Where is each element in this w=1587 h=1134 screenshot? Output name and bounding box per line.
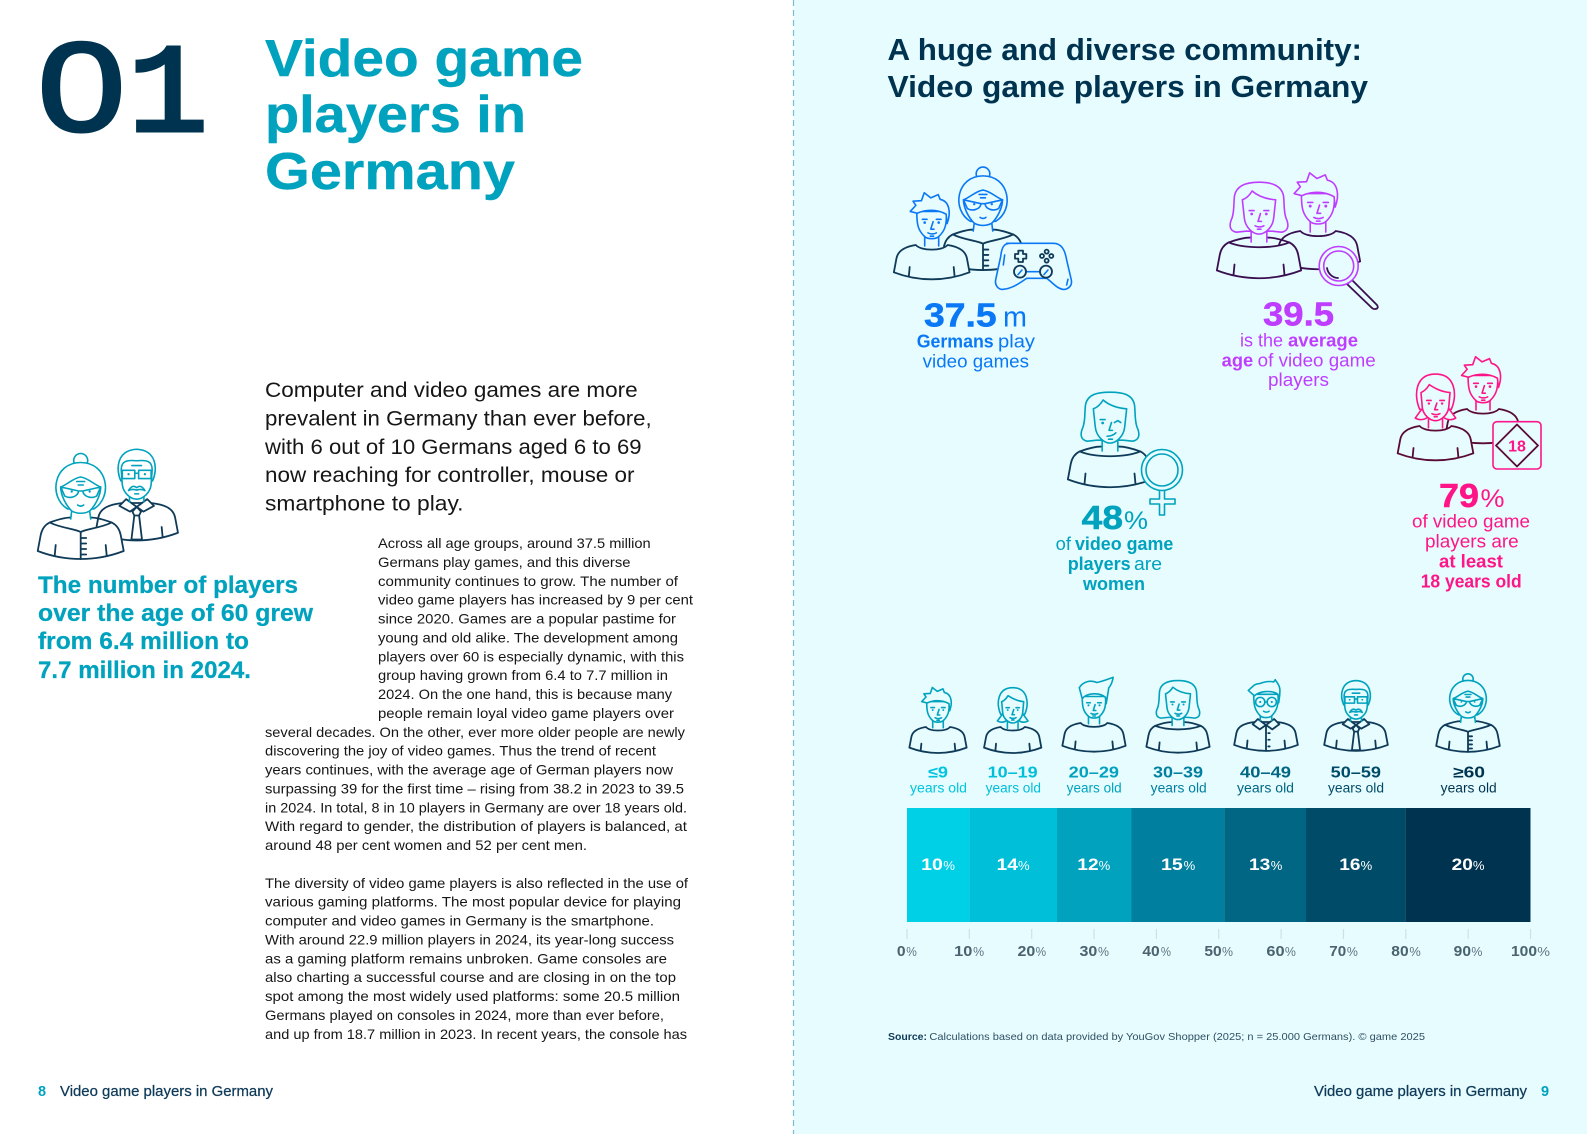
- stat text: at least: [1439, 552, 1503, 572]
- bar value labels: 13: [1249, 856, 1270, 874]
- chart title: A huge and diverse community:: [888, 32, 1362, 67]
- body text: since 2020. Games are a popular pastime for: [378, 612, 676, 626]
- body text: Germans played on consoles in 2024, more than ever before,: [265, 1008, 664, 1023]
- stat text: age: [1222, 351, 1253, 371]
- chart axis: [897, 929, 1550, 960]
- body text: With around 22.9 million players in 2024, its year-long success: [265, 932, 674, 948]
- bar value labels: %: [1018, 859, 1030, 873]
- stat text: 79: [1439, 477, 1479, 514]
- stat text: [1222, 296, 1376, 390]
- age group labels: ≤9: [928, 765, 948, 782]
- body text: discovering the joy of video games. Thus the trend of recent: [265, 744, 656, 759]
- age group figures: [909, 674, 1500, 753]
- stat text: m: [1003, 302, 1027, 334]
- chart axis: %: [1222, 945, 1233, 959]
- age group labels: 40–49: [1240, 765, 1291, 782]
- body text: The diversity of video game players is also reflected in the use of: [265, 876, 688, 891]
- body text: 2024. On the one hand, this is because many: [378, 687, 672, 702]
- page title: [265, 30, 583, 201]
- page title: Video game: [265, 30, 583, 88]
- body text: spot among the most widely used platforms: some 20.5 million: [265, 989, 680, 1004]
- body text: video game players has increased by 9 per cent: [378, 593, 693, 608]
- bar value labels: 12: [1077, 856, 1099, 874]
- body text: computer and video games in Germany is the smartphone.: [265, 914, 654, 929]
- chapter number: [38, 16, 208, 168]
- body text: community continues to grow. The number of: [378, 574, 678, 589]
- chart axis: 40: [1142, 943, 1160, 960]
- source note: Source:: [888, 1031, 927, 1043]
- chart axis: %: [906, 945, 917, 959]
- icon: 20 to 29: [1062, 677, 1126, 752]
- icon: 40 to 49: [1234, 680, 1298, 751]
- age group labels: years old: [1441, 780, 1497, 796]
- icon: woman, man and magnifier: [1217, 173, 1378, 309]
- stat text: [1412, 477, 1530, 592]
- age group labels: years old: [1237, 780, 1294, 796]
- age group labels: years old: [1151, 780, 1207, 796]
- callout: players over 60: [38, 572, 314, 684]
- icon: older players: [38, 449, 178, 559]
- stat text: 37.5: [924, 297, 997, 334]
- body text: Germans play games, and this diverse: [378, 555, 631, 570]
- body text: Across all age groups, around 37.5 million: [378, 536, 651, 551]
- stat text: video game: [1075, 534, 1173, 554]
- stat: 79 percent adults: [1398, 357, 1541, 592]
- page title: Germany: [265, 143, 515, 201]
- stat text: of video game: [1412, 512, 1530, 532]
- body text: years continues, with the average age of German players now: [265, 763, 673, 778]
- chart axis: %: [1098, 945, 1109, 959]
- stat text: video games: [923, 352, 1029, 372]
- stat text: of: [1056, 534, 1072, 554]
- age group labels: 50–59: [1331, 765, 1381, 782]
- icon: woman, man and age rating 18: [1398, 357, 1541, 469]
- bar value labels: 10: [921, 856, 943, 874]
- body text: people remain loyal video game players over: [378, 706, 674, 721]
- stat text: players: [1268, 370, 1329, 390]
- icon: 50 to 59: [1324, 681, 1388, 751]
- bar value labels: %: [1271, 859, 1282, 873]
- icon: woman, man and age rating 18: 18: [1508, 438, 1526, 456]
- chapter number: 0: [38, 16, 125, 158]
- stat text: %: [1480, 485, 1504, 513]
- stat text: 48: [1082, 499, 1123, 536]
- age group labels: [910, 765, 1497, 796]
- stat text: players: [1068, 554, 1131, 574]
- bar value labels: 15: [1161, 856, 1183, 874]
- bar value labels: 20: [1452, 856, 1473, 874]
- chart axis: 30: [1080, 943, 1097, 960]
- chart title: Video game players in Germany: [888, 69, 1369, 104]
- body text: young and old alike. The development among: [378, 630, 678, 645]
- page divider: [792, 0, 794, 1134]
- source note: Calculations based on data provided by YouGov Shopper (2025; n = 25.000 Germans). © game 2025: [929, 1031, 1425, 1043]
- chapter number: 1: [128, 26, 208, 168]
- callout: players over 60: The number of players: [38, 572, 298, 599]
- stat text: average: [1288, 331, 1358, 351]
- lead paragraph: with 6 out of 10 Germans aged 6 to 69: [264, 435, 642, 459]
- chart axis: 70: [1329, 943, 1346, 960]
- callout: players over 60: from 6.4 million to: [38, 628, 249, 655]
- chart axis: 80: [1391, 943, 1409, 960]
- bar value labels: %: [1361, 859, 1372, 873]
- body text: in 2024. In total, 8 in 10 players in Germany are over 18 years old.: [265, 800, 687, 815]
- stat text: is the: [1240, 331, 1283, 351]
- stat text: [917, 297, 1035, 372]
- stat: 37.5 million players: [894, 167, 1072, 372]
- bar value labels: 16: [1339, 856, 1360, 874]
- footer right: Video game players in Germany: [1314, 1084, 1528, 1100]
- age group labels: years old: [1067, 780, 1122, 796]
- chart axis: 50: [1204, 943, 1222, 960]
- body text: around 48 per cent women and 52 per cent men.: [265, 838, 587, 853]
- chart axis: %: [1347, 945, 1358, 959]
- icon: woman and female symbol: [1068, 392, 1182, 515]
- icon: under 9: [909, 687, 967, 753]
- chart axis: 0: [897, 943, 906, 960]
- stat text: players are: [1425, 532, 1519, 552]
- stat: 48 percent women: [1056, 392, 1182, 594]
- stat: average age 39.5: [1217, 173, 1378, 390]
- chart axis: %: [1471, 945, 1482, 959]
- chart axis: 20: [1018, 943, 1035, 960]
- footer left: Video game players in Germany: [60, 1084, 274, 1100]
- lead paragraph: Computer and video games are more: [265, 378, 638, 402]
- callout: players over 60: 7.7 million in 2024.: [38, 657, 251, 684]
- stat text: of video game: [1258, 351, 1376, 371]
- age group labels: 10–19: [988, 765, 1038, 782]
- lead paragraph: now reaching for controller, mouse or: [265, 463, 634, 487]
- chart axis: %: [973, 945, 984, 959]
- lead paragraph: prevalent in Germany than ever before,: [265, 406, 652, 430]
- bar value labels: [921, 856, 1484, 874]
- chart axis: %: [1161, 945, 1171, 959]
- lead paragraph: smartphone to play.: [265, 492, 464, 516]
- chart axis: %: [1285, 945, 1296, 959]
- right page background: [794, 0, 1587, 1134]
- body text: various gaming platforms. The most popular device for playing: [265, 895, 681, 910]
- stacked bar chart: [907, 808, 1530, 922]
- body text: With regard to gender, the distribution of players is balanced, at: [265, 819, 687, 834]
- bar value labels: 14: [997, 856, 1019, 874]
- callout: players over 60: over the age of 60 grew: [38, 600, 314, 627]
- body text: also charting a successful course and are closing in on the top: [265, 970, 676, 985]
- lead paragraph: [264, 378, 652, 516]
- stat text: play: [998, 332, 1035, 352]
- stat text: %: [1124, 507, 1148, 535]
- stat text: 39.5: [1263, 296, 1334, 333]
- bar value labels: %: [1184, 859, 1195, 873]
- age group labels: 20–29: [1069, 765, 1119, 782]
- icon: boy, grandmother and controller: [894, 167, 1072, 289]
- body text: as a gaming platform remains unbroken. Game consoles are: [265, 951, 667, 966]
- body text: several decades. On the other, ever more older people are newly: [265, 725, 685, 740]
- stat text: 18 years old: [1421, 572, 1522, 592]
- chart axis: 10: [954, 943, 972, 960]
- stat text: [1056, 499, 1173, 594]
- chart axis: %: [1036, 945, 1046, 959]
- body text: [265, 536, 693, 1042]
- stat text: women: [1082, 574, 1145, 594]
- chart title: [888, 32, 1369, 104]
- age group labels: 30–39: [1153, 765, 1203, 782]
- age group labels: ≥60: [1453, 765, 1485, 782]
- bar value labels: %: [1099, 859, 1110, 873]
- age group labels: years old: [1328, 780, 1384, 796]
- chart axis: 100: [1511, 943, 1537, 960]
- icon: 10 to 19: [984, 688, 1041, 753]
- age group labels: years old: [986, 780, 1041, 796]
- chart axis: %: [1537, 945, 1550, 959]
- icon: 30 to 39: [1146, 681, 1210, 753]
- stat text: Germans: [917, 332, 994, 352]
- body text: surpassing 39 for the first time – rising from 38.2 in 2023 to 39.5: [265, 781, 684, 796]
- body text: players over 60 is especially dynamic, with this: [378, 649, 684, 664]
- chart axis: %: [1409, 945, 1421, 959]
- bar value labels: %: [943, 859, 955, 873]
- age group labels: years old: [910, 780, 967, 796]
- stat text: are: [1134, 554, 1162, 574]
- icon: 60 plus: [1436, 674, 1500, 752]
- chart axis: 60: [1266, 943, 1285, 960]
- footer left: 8: [38, 1084, 46, 1100]
- body text: group having grown from 6.4 to 7.7 million in: [378, 668, 668, 683]
- body text: and up from 18.7 million in 2023. In recent years, the console has: [265, 1027, 687, 1042]
- footer right: 9: [1541, 1084, 1549, 1100]
- bar value labels: %: [1473, 859, 1484, 873]
- chart axis: 90: [1454, 943, 1471, 960]
- page title: players in: [265, 86, 526, 144]
